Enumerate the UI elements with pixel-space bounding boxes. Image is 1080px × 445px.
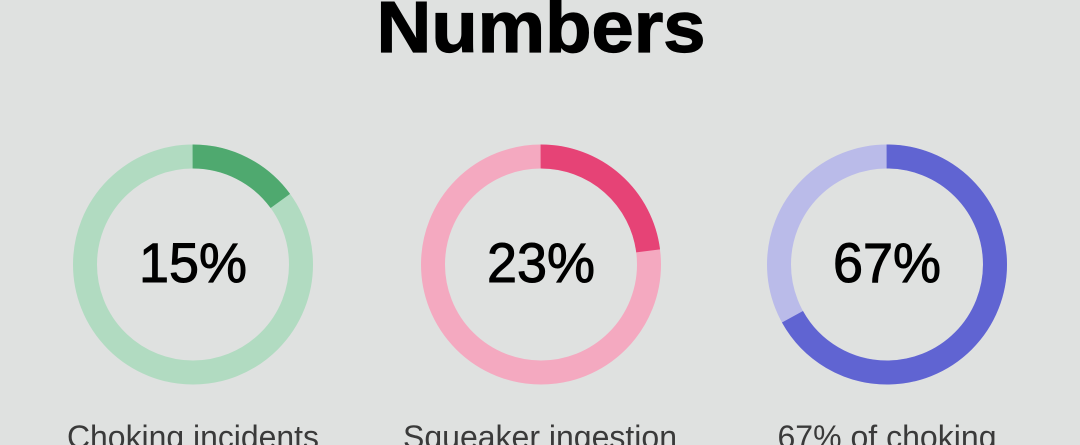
donut chart: 67% <box>779 156 995 372</box>
value: 67%: 67% <box>833 231 941 294</box>
donut chart: 23% <box>433 156 649 372</box>
donut chart: 15% <box>85 156 301 372</box>
panel: 67% of choking <box>778 156 996 445</box>
panel: squeaker ingestion 23% <box>403 156 677 445</box>
value: 15%: 15% <box>139 231 247 294</box>
panel: choking incidents 15% <box>67 156 319 445</box>
value: 23%: 23% <box>487 231 595 294</box>
